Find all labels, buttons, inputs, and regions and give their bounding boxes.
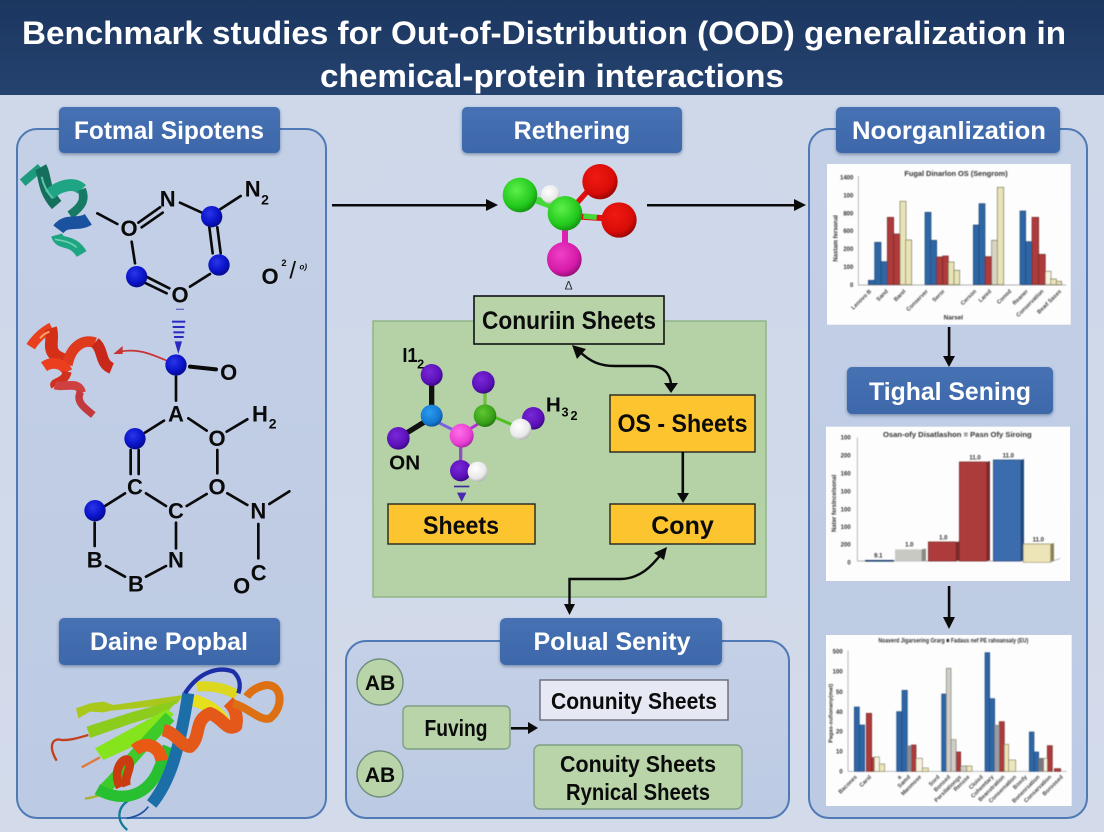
chart: single bars middle: 160 xyxy=(841,471,851,477)
panel: green process area xyxy=(373,321,766,597)
heading: Polual Senity xyxy=(500,618,722,665)
chart: grouped bars top: Barel xyxy=(893,289,908,303)
molecule: ball and stick lower: 2 xyxy=(417,357,424,371)
chart: grouped bars top: Narsel xyxy=(944,314,963,321)
chart: single bars middle: 9.1 xyxy=(874,554,883,560)
chart: grouped bars bottom: 100 xyxy=(833,670,843,676)
atom labels: C xyxy=(251,561,267,586)
chart: grouped bars bottom: 50 xyxy=(836,690,843,696)
bonds xyxy=(95,196,289,577)
arrow: double-headed sheets link xyxy=(572,345,678,393)
ribbon: green helix xyxy=(23,167,88,254)
chart: grouped bars bottom: 10 xyxy=(836,749,843,755)
chart: grouped bars top: Bead Sases xyxy=(1036,289,1063,316)
box: Cony: Cony xyxy=(651,512,714,540)
arrow: rethering to normalization xyxy=(647,199,806,211)
chart: grouped bars bottom: Cloisd xyxy=(968,774,985,791)
chart: single bars middle: Osan-ofy Disatlashon ≡ Pasn Ofy Siroing xyxy=(883,430,1032,439)
chart: single bars middle: 1.0 xyxy=(905,542,914,548)
atom labels: N xyxy=(250,499,266,524)
panel: bottom center xyxy=(346,618,789,818)
chart: grouped bars bottom: Bosdy xyxy=(1012,774,1029,791)
chart: grouped bars bottom: Consernation xyxy=(988,774,1018,805)
panel: left inputs xyxy=(17,107,326,830)
chart: grouped bars bottom: Bacones xyxy=(838,775,859,795)
chart: grouped bars bottom: Cohemtary xyxy=(970,774,996,800)
chart: grouped bars top: 0 xyxy=(850,283,854,289)
heading: Rethering xyxy=(462,107,682,153)
chart: grouped bars bottom: a xyxy=(897,774,904,781)
node: AB bottom xyxy=(357,751,403,797)
chart: grouped bars bottom: 20 xyxy=(836,730,843,736)
chart: single bars middle: 11.0 xyxy=(969,456,981,462)
atom labels: o) xyxy=(300,262,307,271)
atom labels: O xyxy=(208,475,226,500)
arrow: inputs to rethering xyxy=(332,199,498,211)
chart: grouped bars bottom: Persilationgs xyxy=(934,775,963,804)
arrow: signal to final chart xyxy=(943,586,955,629)
chart: grouped bars top: Conservation xyxy=(1016,288,1046,319)
node: AB top xyxy=(357,659,403,705)
atom labels: B xyxy=(128,571,144,596)
atom labels: N xyxy=(160,187,176,212)
box: Conuriin Sheets xyxy=(474,296,664,344)
chart: grouped bars bottom: Rensse xyxy=(953,775,971,793)
box: Conunity Sheets: Conunity Sheets xyxy=(551,688,717,714)
atom labels: C xyxy=(168,499,184,524)
chart: grouped bars bottom: Carsl xyxy=(859,774,873,789)
box: Conuriin Sheets: Conuriin Sheets xyxy=(482,307,656,335)
molecule: ball and stick lower: 3 xyxy=(561,406,569,420)
atom labels: O xyxy=(233,573,250,598)
atom labels: H xyxy=(252,402,268,427)
chart: grouped bars top: 600 xyxy=(843,229,854,235)
panel: right results xyxy=(809,107,1087,818)
heading: Polual Senity: Polual Senity xyxy=(534,628,691,656)
atom labels: O xyxy=(171,283,189,308)
heading: Noorganlization xyxy=(836,107,1060,153)
arrow: normalization to signal xyxy=(943,327,955,367)
chart: grouped bars bottom: 40 xyxy=(836,710,843,716)
chart: grouped bars bottom: Noaverd Jigarsering Grarg ■ Fadaus nef PE rahoansaly (EU) xyxy=(878,638,1028,645)
atom labels: N xyxy=(245,177,261,202)
chart: single bars middle: 100 xyxy=(841,435,851,441)
ribbon: folded protein xyxy=(52,670,280,830)
arrow: Cony to Polual Senity xyxy=(564,547,667,615)
molecule: ball and stick lower xyxy=(387,344,578,502)
title banner: Benchmark studies for Out-of-Distribution (OOD) generalization in xyxy=(22,15,1066,51)
atom labels: C xyxy=(127,475,143,500)
chart: grouped bars top: 200 xyxy=(843,247,854,253)
box: Sheets: Sheets xyxy=(423,512,499,540)
node: AB bottom: AB xyxy=(365,764,395,787)
atom labels: 2 xyxy=(261,192,269,208)
chart: grouped bars top: 100 xyxy=(843,193,854,199)
box: Sheets xyxy=(388,504,535,544)
chart: grouped bars top: Fugal Dinarlon OS (Sengrom) xyxy=(904,169,1008,178)
atom labels: O xyxy=(220,360,237,385)
chart: single bars middle: 11.0 xyxy=(1003,454,1015,460)
molecule: ball and stick top xyxy=(503,164,637,292)
chart: grouped bars bottom: Bonsed xyxy=(933,774,952,793)
chart: grouped bars top: Conod xyxy=(996,288,1013,306)
chart: grouped bars top: Lenovo B xyxy=(851,289,873,311)
chart: single bars middle: 200 xyxy=(841,543,851,549)
molecule: ball and stick top: Δ xyxy=(565,278,573,292)
chart: grouped bars top: Conserver xyxy=(906,288,930,313)
chart: grouped bars top: Sand xyxy=(876,288,890,303)
chart: grouped bars top: Lared xyxy=(978,288,993,304)
box: Conunity Sheets xyxy=(540,680,728,720)
chart: single bars middle xyxy=(826,427,1070,581)
arrow: Fuving to sheets xyxy=(511,722,538,734)
chart: grouped bars top: Cerson xyxy=(960,288,978,307)
heading: Tighal Sening: Tighal Sening xyxy=(869,378,1031,406)
atom labels: 2 xyxy=(269,416,277,432)
chart: grouped bars top xyxy=(827,164,1071,325)
heading: Rethering: Rethering xyxy=(514,117,630,145)
chart: single bars middle: Nater fersIncelsonal xyxy=(832,474,838,532)
ribbon: red helix xyxy=(31,327,167,415)
molecule: ball and stick lower: H xyxy=(546,394,561,417)
title banner: chemical-protein interactions xyxy=(320,58,784,94)
atom labels: 2 xyxy=(281,258,287,268)
atom labels: O xyxy=(208,426,226,451)
atom labels: O xyxy=(120,216,138,241)
heading: Tighal Sening xyxy=(847,367,1053,414)
chart: grouped bars bottom: Samd xyxy=(897,774,912,790)
chart: grouped bars bottom: 0 xyxy=(839,770,843,776)
chart: grouped bars top: 1400 xyxy=(840,175,854,181)
chart: grouped bars bottom xyxy=(826,635,1072,806)
chart: grouped bars bottom: Consarvation xyxy=(1023,774,1053,804)
chart: single bars middle: 100 xyxy=(841,507,851,513)
stereo wedge xyxy=(172,309,185,354)
atoms: blue spheres xyxy=(84,206,230,521)
heading: Noorganlization: Noorganlization xyxy=(852,117,1046,145)
title banner xyxy=(0,0,1104,95)
chart: grouped bars top: Nastam fersonal xyxy=(833,215,839,262)
box: Fuving: Fuving xyxy=(424,715,488,741)
chart: grouped bars top: Reaner xyxy=(1012,288,1030,307)
chart: grouped bars top: Seror xyxy=(932,288,947,304)
chart: single bars middle: 11.0 xyxy=(1033,538,1045,544)
box: Conuity Sheets / Rynical Sheets xyxy=(534,745,742,809)
atom labels: A xyxy=(168,402,184,427)
atom labels: / xyxy=(289,257,296,284)
chart: single bars middle: 0 xyxy=(847,560,851,566)
molecule: ball and stick lower: 2 xyxy=(570,409,578,423)
chart: grouped bars bottom: Bonenrsation xyxy=(1011,774,1042,805)
chart: single bars middle: 1.0 xyxy=(939,536,948,542)
box: Fuving xyxy=(403,706,510,749)
chart: grouped bars bottom: 500 xyxy=(833,649,843,655)
arrow: OS Sheets to Cony xyxy=(677,452,689,503)
chart: grouped bars bottom: Sord xyxy=(928,774,942,788)
chart: single bars middle: 100 xyxy=(841,525,851,531)
chart: grouped bars bottom: Boroosed xyxy=(1042,774,1065,797)
heading: Fotmal Sipotens: Fotmal Sipotens xyxy=(74,117,264,145)
box: Cony xyxy=(610,504,755,544)
atom labels: N xyxy=(168,547,184,572)
atom labels xyxy=(87,177,307,598)
chart: single bars middle: 200 xyxy=(841,453,851,459)
box: OS - Sheets: OS - Sheets xyxy=(618,410,748,438)
node: AB top: AB xyxy=(365,672,395,695)
box: Conuity Sheets / Rynical Sheets: Conuity Sheets xyxy=(560,751,716,777)
box: Conuity Sheets / Rynical Sheets: Rynical Sheets xyxy=(566,779,710,805)
molecule: ball and stick lower: I1 xyxy=(402,344,418,367)
chart: single bars middle: 100 xyxy=(841,489,851,495)
chart: grouped bars top: 100 xyxy=(843,265,854,271)
chart: grouped bars top: 800 xyxy=(843,211,854,217)
chart: grouped bars bottom: Pagas-sufionany(mat) xyxy=(829,684,835,743)
chart: grouped bars bottom: Beanstration xyxy=(978,774,1007,803)
heading: Fotmal Sipotens xyxy=(59,107,280,153)
molecule diagram: chemical structure xyxy=(23,167,307,598)
atom labels: O xyxy=(261,264,279,289)
box: OS - Sheets xyxy=(610,395,755,452)
molecule: ball and stick lower: ON xyxy=(389,451,420,474)
atom labels: B xyxy=(87,547,103,572)
heading: Daine Popbal xyxy=(59,618,280,665)
heading: Daine Popbal: Daine Popbal xyxy=(90,628,248,656)
chart: grouped bars bottom: Manmose xyxy=(900,775,923,797)
